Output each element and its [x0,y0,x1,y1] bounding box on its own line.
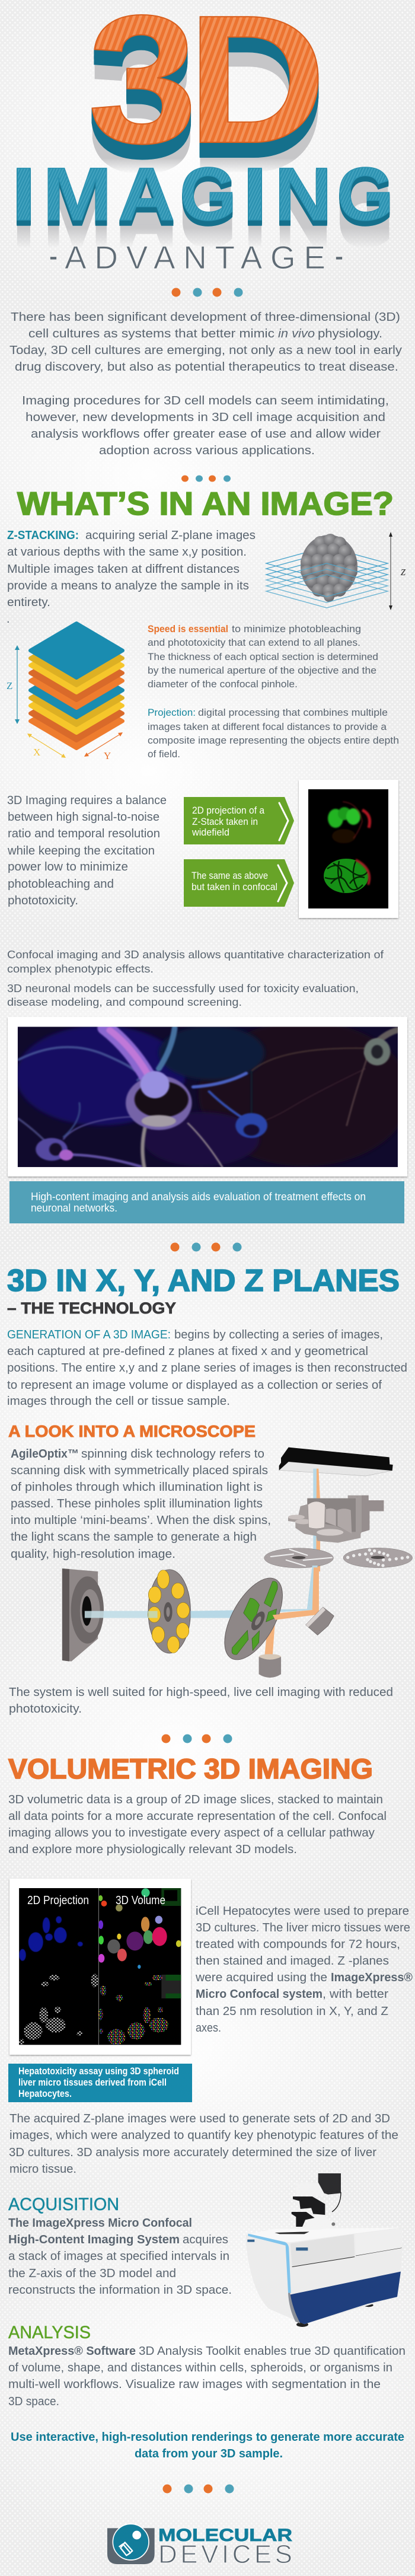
text: icell hepatocytes: axes. [196,2022,221,2035]
text: projection: of field. [148,749,180,760]
text: icell hepatocytes: ImageXpress® [331,1971,413,1984]
text: agileoptix: into multiple ‘mini-beams’. When the disk spins, [11,1514,271,1527]
text: analysis: 3D Analysis Toolkit enables true 3D quantification [139,2345,406,2358]
intro text: physiology. [318,327,382,340]
text: icell hepatocytes: treated with compounds for 72 hours, [196,1938,400,1951]
text: projection: Projection: [148,707,196,718]
intro text: cell cultures as systems that better mimic [28,327,274,340]
text: analysis: ANALYSIS [8,2323,91,2342]
text: acquisition [8,2195,232,2297]
title word: IMAGING: A [118,152,175,236]
logo: molecular devices [107,2524,292,2569]
caption: neuronal networks: neuronal networks. [31,1202,117,1214]
text: confocal imaging: Confocal imaging and 3D analysis allows quantitative characterization of [7,949,384,961]
intro text: analysis workflows offer greater ease of use and allow wider [31,428,381,441]
text: analysis: MetaXpress® Software [8,2345,136,2358]
icon: layered image planes with xyz axes: Z [7,680,12,691]
text: icell hepatocytes: then stained and imaged. Z -planes [196,1955,389,1968]
text: system well suited: The system is well suited for high-speed, live cell imaging with reduced [9,1686,393,1699]
text: balance paragraph: between high signal-to-noise [8,811,159,824]
text: projection: images taken at different focal distances to provide a [148,722,387,732]
image card: 2D projection vs 3D volume: 3D Volume [116,1894,165,1907]
intro text: drug discovery, but also as potential therapeutics to treat disease. [15,361,398,374]
heading: what's in an image: WHAT’S IN AN IMAGE? [17,485,394,522]
heading: 3D in x, y, and z planes: 3D IN X, Y, AND Z PLANES [7,1264,400,1298]
caption: hepatotoxicity assay: Hepatocytes. [18,2089,72,2099]
text: acquisition: reconstructs the information in 3D space. [8,2284,232,2297]
title word: IMAGING [11,152,394,236]
text: acquired z-plane images: micro tissue. [9,2163,76,2176]
callout arrow: widefield [184,797,294,844]
closing statement [11,2431,404,2460]
intro text: Imaging procedures for 3D cell models can seem intimidating, [22,394,389,407]
image card: neurons [8,1017,410,1177]
caption: neuronal networks [9,1181,404,1223]
text: confocal imaging: disease modeling, and compound screening. [7,996,242,1008]
text: generation of a 3D image: begins by collecting a series of images, [174,1328,383,1341]
text: z-stacking: provide a means to analyze the sample in its [7,579,249,592]
text: system well suited [9,1686,393,1716]
text: acquisition: The ImageXpress Micro Confocal [8,2217,192,2230]
text: icell hepatocytes: , with better [323,1988,388,2001]
text: balance paragraph: 3D Imaging requires a balance [7,794,167,807]
text: acquired z-plane images: images, which were analyzed to quantify key phenotypic features of the [9,2129,398,2142]
text: generation of a 3D image [7,1328,407,1408]
text: z-stacking [7,529,256,626]
text: analysis: of volume, shape, and distances within cells, spheroids, or organisms in [8,2361,392,2374]
text: z-stacking: . [7,613,10,626]
title word: IMAGING: I [242,152,267,236]
text: agileoptix: spinning disk technology refers to [81,1448,264,1461]
text: volumetric data: all data points for a more accurate representation of the cell. Confocal [8,1810,387,1823]
text: agileoptix: of pinholes through which illumination light is [11,1481,263,1494]
heading: a look into a microscope: A LOOK INTO A MICROSCOPE [8,1422,256,1440]
icon: z-stack spheroid with image planes: z [400,563,406,578]
intro text [9,311,402,457]
dots divider 4 [161,1734,232,1743]
text: acquisition: the Z-axis of the 3D model and [8,2267,176,2280]
title word: IMAGING: I [11,152,36,236]
text: z-stacking: Z-STACKING: [7,529,79,542]
text: confocal imaging [7,949,384,1008]
icon: layered image planes with xyz axes [7,623,123,761]
text: acquired z-plane images: The acquired Z-plane images were used to generate sets of 2D and 3D [9,2112,390,2125]
text: balance paragraph: ratio and temporal resolution [8,827,160,840]
text: generation of a 3D image: GENERATION OF A 3D IMAGE: [7,1328,171,1341]
text: generation of a 3D image: images through the cell or tissue sample. [7,1395,230,1408]
title word: IMAGING: G [180,152,237,236]
text: icell hepatocytes: than 25 nm resolution in X, Y, and Z [196,2005,388,2018]
logo mark [107,2524,155,2564]
caption: hepatotoxicity assay: Hepatotoxicity assay using 3D spheroid [18,2066,179,2077]
title word: IMAGING: G [337,152,394,236]
text: confocal imaging: 3D neuronal models can be successfully used for toxicity evaluation, [7,983,359,994]
text: volumetric data: and explore more physiologically relevant 3D models. [8,1843,297,1856]
title: 3D IMAGING ADVANTAGE [11,0,394,276]
image card: 2D projection vs 3D volume [9,1879,191,2055]
text: confocal imaging: complex phenotypic effects. [7,963,154,975]
text: agileoptix: scanning disk with symmetrically placed spirals [11,1464,268,1477]
text: volumetric data: imaging allows you to investigate every aspect of a cellular pathway [8,1826,375,1839]
text: analysis [8,2323,406,2408]
logo: molecular devices: MOLECULAR [158,2526,292,2545]
text: agileoptix: AgileOptix™ [11,1448,79,1461]
text: z-stacking: at various depths with the same x,y position. [7,546,247,559]
callout arrow: widefield: widefield [191,827,229,838]
callout arrow: confocal [184,859,294,907]
title word: ADVANTAGE: - [335,237,343,274]
caption: hepatotoxicity assay: liver micro tissues derived from iCell [18,2077,167,2088]
logo: molecular devices: DEVICES [158,2540,292,2569]
caption: neuronal networks: High-content imaging and analysis aids evaluation of treatment effects on [31,1191,366,1203]
text: icell hepatocytes: Micro Confocal system [196,1988,323,2001]
title word: IMAGING: N [274,152,332,236]
title word: IMAGING: I [242,152,267,236]
text: projection: digital processing that combines multiple [198,707,388,718]
text: balance paragraph: power low to minimize [8,860,128,873]
dots divider 3 [171,1243,242,1251]
text: z-stacking: entirety. [7,596,50,609]
text: acquired z-plane images: 3D cultures. 3D analysis more accurately determined the size of liver [9,2146,376,2159]
diagram: spinning disk microscope light path [62,1448,413,1678]
title word: IMAGING: I [11,152,36,236]
intro text: There has been significant development of three-dimensional (3D) [11,311,400,324]
text: acquisition: High-Content Imaging System [8,2233,180,2246]
title word: 3D [91,14,319,171]
text: acquisition: acquires [183,2233,228,2246]
text: balance paragraph: photobleaching and [8,878,114,891]
title word: IMAGING: M [43,152,112,236]
callout arrow: confocal: but taken in confocal [191,882,277,892]
title word: IMAGING: M [43,152,112,236]
dots divider 5 [162,2485,234,2493]
text: speed is essential [148,624,378,690]
image card: widefield vs confocal fluorescence [299,780,398,918]
image card: 2D projection vs 3D volume: 2D Projection [27,1894,89,1907]
heading: volumetric 3D imaging: VOLUMETRIC 3D IMAGING [8,1753,373,1784]
text: generation of a 3D image: each captured at pre-defined z planes at fixed x and y geometrical [7,1345,368,1358]
title word: ADVANTAGE: ADVANTAGE [65,239,325,276]
title word: IMAGING: G [337,152,394,236]
text: balance paragraph: phototoxicity. [8,894,78,907]
text: z-stacking: Multiple images taken at diffrent distances [7,563,240,576]
intro text: adoption across various applications. [99,444,315,457]
text: balance paragraph [7,794,167,907]
text: icell hepatocytes: iCell Hepatocytes were used to prepare [196,1905,409,1918]
text: volumetric data [8,1793,387,1856]
text: z-stacking: acquiring serial Z-plane images [85,529,256,542]
closing statement: data from your 3D sample. [135,2447,283,2460]
callout arrow: confocal: The same as above [191,871,268,881]
title word: IMAGING: N [274,152,332,236]
diagram part: camera, filter wheel, dichroic wheel, mirror and objective [62,1566,334,1678]
dots divider 1 [172,288,243,297]
text: volumetric data: 3D volumetric data is a group of 2D image slices, stacked to maintain [8,1793,383,1806]
text: system well suited: phototoxicity. [9,1703,82,1716]
text: acquisition: a stack of images at specified intervals in [8,2250,229,2263]
text: speed is essential: by the numerical aperture of the objective and the [148,665,376,676]
text: agileoptix: the light scans the sample to generate a high [11,1531,257,1544]
text: speed is essential: The thickness of each optical section is determined [148,652,378,662]
text: icell hepatocytes: were acquired using the [195,1971,327,1984]
text: acquisition: ACQUISITION [8,2195,119,2214]
dots divider 2 [181,476,231,482]
text: generation of a 3D image: to represent an image volume or displayed as a collection or series of [7,1379,382,1392]
text: speed is essential: Speed is essential [148,624,228,635]
text: agileoptix: quality, high-resolution image. [11,1548,175,1561]
intro text: in vivo [278,327,315,340]
text: acquired z-plane images [9,2112,398,2176]
icon: z-stack spheroid with image planes [266,532,406,610]
text: generation of a 3D image: positions. The entire x,y and z plane series of images is then reconstructed [7,1362,407,1375]
intro text: however, new developments in 3D cell image acquisition and [25,411,385,424]
text: speed is essential: diameter of the confocal pinhole. [148,679,298,690]
image: imagexpress micro confocal instrument [246,2173,403,2327]
text: speed is essential: to minimize photobleaching [232,624,361,635]
icon: layered image planes with xyz axes: X [33,747,40,758]
text: projection [148,707,399,760]
title word: ADVANTAGE: - [49,237,58,274]
title word: IMAGING: A [118,152,175,236]
diagram part: upper stage [264,1448,413,1571]
text: analysis: 3D space. [8,2395,59,2408]
icon: layered image planes with xyz axes: Y [104,750,111,761]
text: analysis: multi-well workflows. Visualize raw images with segmentation in the [8,2378,381,2391]
text: agileoptix [11,1448,271,1561]
intro text: Today, 3D cell cultures are emerging, not only as a new tool in early [9,344,402,357]
closing statement: Use interactive, high-resolution renderings to generate more accurate [11,2431,404,2444]
subheading: the technology: – THE TECHNOLOGY [7,1299,176,1317]
title word: IMAGING: G [180,152,237,236]
caption: hepatotoxicity assay [8,2064,192,2102]
text: agileoptix: passed. These pinholes split illumination lights [11,1497,263,1510]
text: projection: composite image representing the objects entire depth [148,735,399,746]
callout arrow: widefield: Z-Stack taken in [192,817,258,827]
text: icell hepatocytes: 3D cultures. The liver micro tissues were [196,1921,410,1934]
callout arrow: widefield: 2D projection of a [192,805,265,816]
text: balance paragraph: while keeping the excitation [7,844,155,857]
text: icell hepatocytes [195,1905,413,2035]
text: speed is essential: and phototoxicity that can extend to all planes. [148,637,360,648]
